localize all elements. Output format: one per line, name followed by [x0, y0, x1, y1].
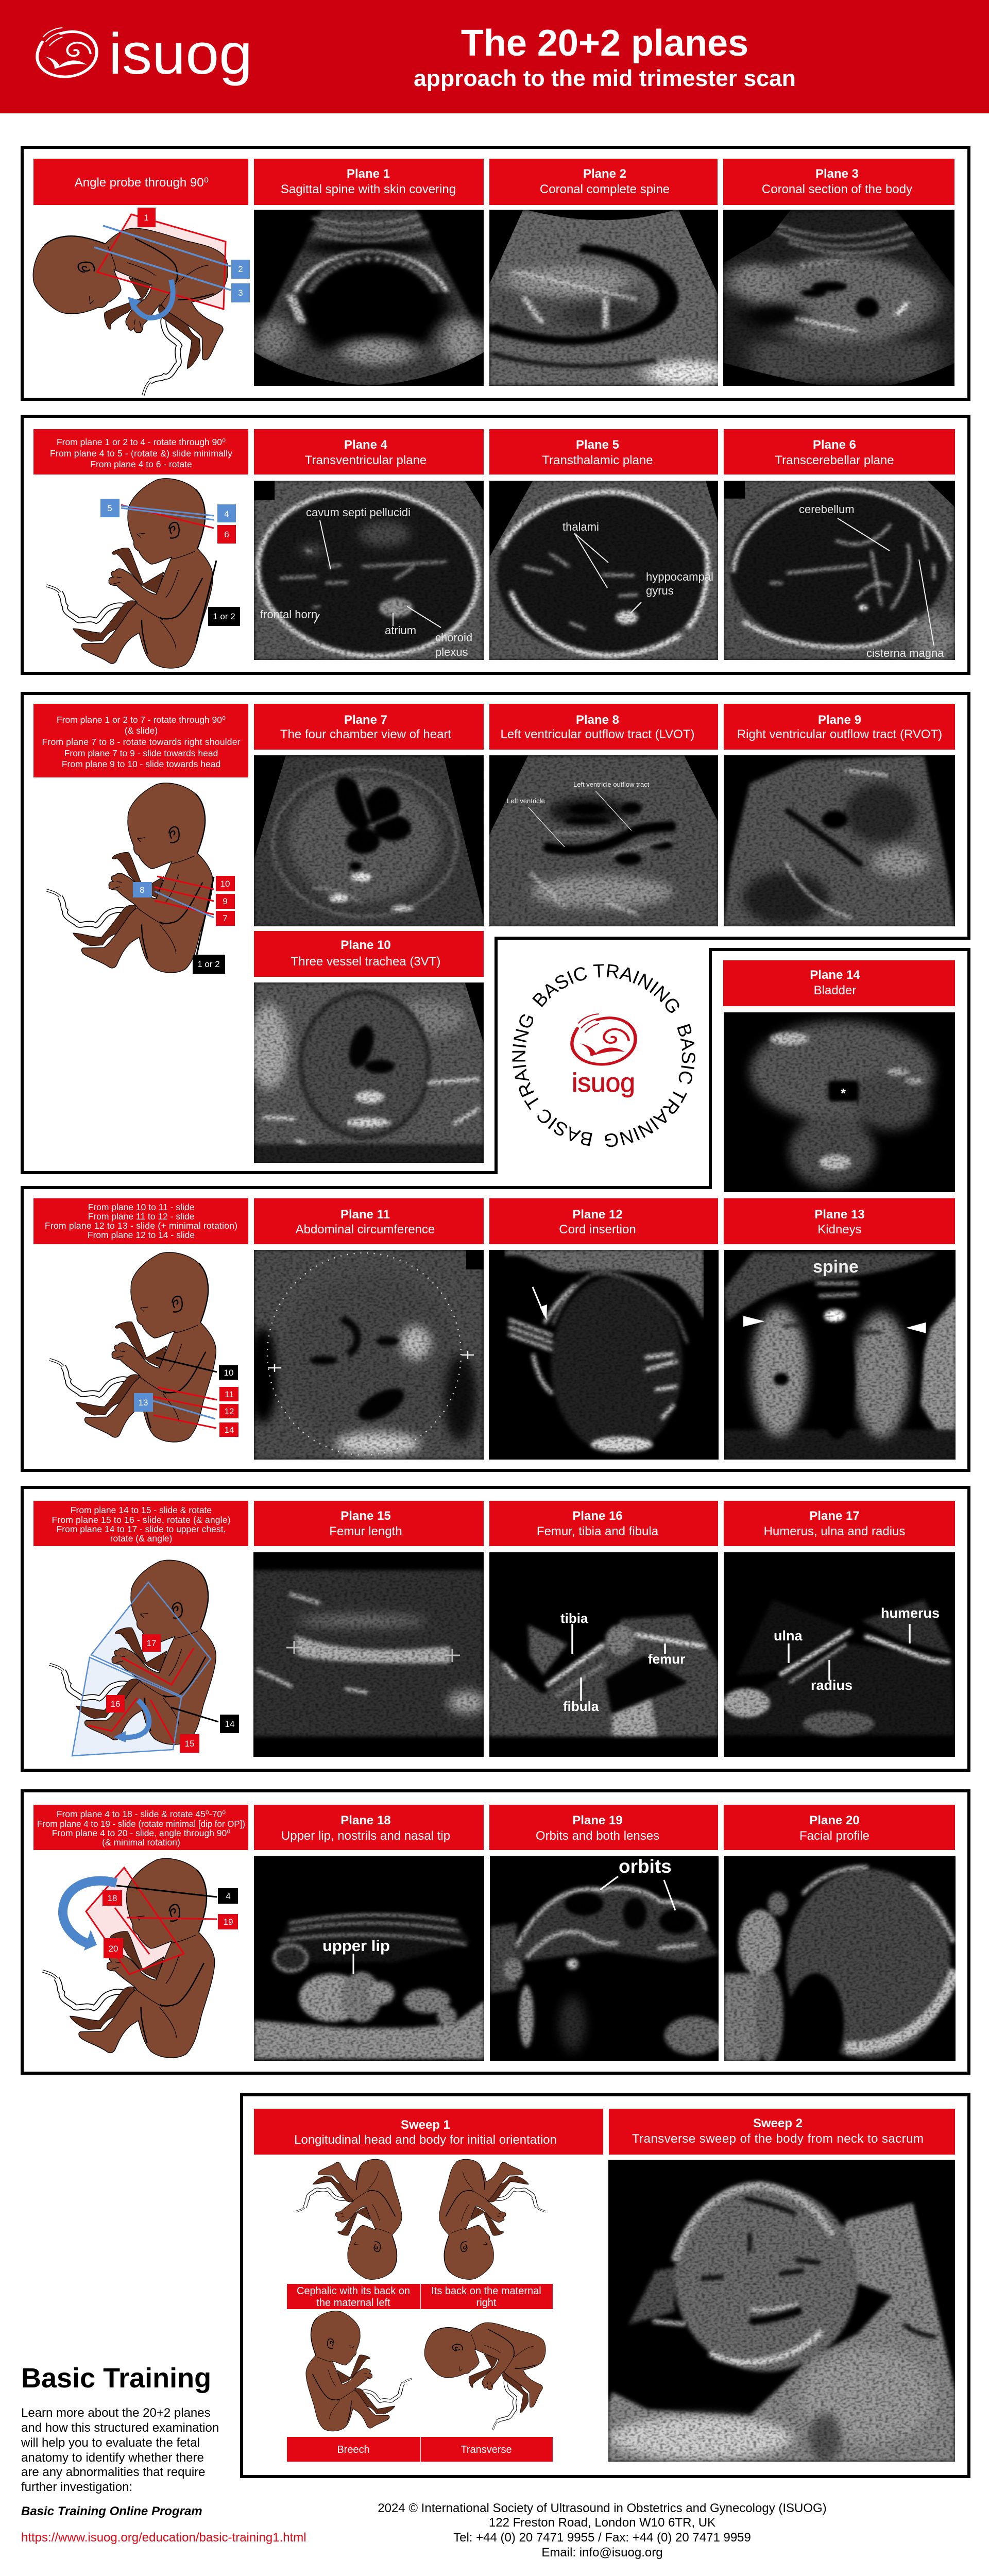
heading: plane 12: Cord insertion	[559, 1223, 636, 1236]
heading: plane 17: Humerus, ulna and radius	[764, 1524, 905, 1538]
footer: contact: 122 Freston Road, London W10 6TR, UK	[489, 2516, 715, 2530]
footer: contact	[378, 2501, 827, 2560]
ultrasound: plane 16: tibia	[560, 1611, 588, 1626]
instruction: planes 1 or 2 to 6	[33, 429, 248, 474]
ultrasound: plane 8: Left ventricle outflow tract	[573, 781, 650, 788]
diagram: fetus with planes 15, 16, 17: 16	[111, 1699, 120, 1709]
ultrasound: plane 11	[250, 1250, 484, 1460]
instruction: planes 14 to 17: rotate (& angle)	[110, 1533, 172, 1544]
diagram: fetus with planes 4, 5, 6: 1 or 2	[213, 612, 235, 621]
diagram: fetus with planes 4, 5, 6: 4	[224, 509, 229, 519]
ultrasound: plane 12	[489, 1250, 719, 1460]
instruction: planes 14 to 17: From plane 14 to 17 - slide to upper chest,	[57, 1524, 226, 1534]
label: cephalic left	[287, 2284, 420, 2309]
instruction: planes 14 to 17	[33, 1501, 248, 1546]
diagram: fetus with planes 4, 5, 6	[46, 479, 240, 668]
heading: plane 19	[489, 1805, 718, 1850]
header band	[0, 0, 989, 113]
instruction: planes 4 to 20: From plane 4 to 20 - slide, angle through 90⁰	[52, 1828, 230, 1838]
ultrasound: plane 5	[489, 481, 719, 661]
panel: basic training logo and planes 11-14	[21, 948, 970, 1472]
heading: plane 20: Plane 20	[809, 1814, 860, 1827]
heading: plane 18: Plane 18	[340, 1814, 391, 1827]
heading: plane 16: Plane 16	[572, 1509, 623, 1523]
icon: isuog logo mark	[37, 28, 97, 77]
instruction: planes 4 to 20: From plane 4 to 19 - slide (rotate minimal [dip for OP])	[37, 1819, 245, 1829]
heading: plane 20	[724, 1805, 955, 1850]
paragraph: further investigation:	[21, 2480, 132, 2494]
paragraph: anatomy to identify whether there	[21, 2451, 204, 2465]
paragraph: Learn more about the 20+2 planes	[21, 2406, 211, 2420]
panel: planes 18-20	[22, 1791, 969, 2075]
diagram: fetus with planes 18, 19, 20: 18	[108, 1893, 117, 1903]
diagram: fetus with planes 18, 19, 20	[42, 1858, 238, 2058]
label: breech	[287, 2437, 420, 2462]
heading: plane 14	[723, 960, 955, 1006]
heading: plane 20: Facial profile	[799, 1829, 869, 1843]
heading: Basic Training	[21, 2363, 211, 2394]
ultrasound: plane 3	[723, 209, 956, 386]
diagram: fetus with planes 1, 2, 3	[33, 208, 250, 395]
footer: contact: Tel: +44 (0) 20 7471 9955 / Fax: +44 (0) 20 7471 9959	[453, 2531, 751, 2545]
heading: plane 3: Coronal section of the body	[762, 182, 912, 196]
heading: plane 10	[254, 931, 484, 977]
diagram: fetus with planes 18, 19, 20: 4	[226, 1891, 231, 1901]
diagram: fetus with planes 4, 5, 6: 5	[107, 503, 112, 513]
ring text: BASIC TRAINING	[532, 964, 679, 1013]
panel: planes 15-17	[22, 1487, 969, 1770]
heading: plane 7: Plane 7	[344, 713, 387, 727]
paragraph: and how this structured examination	[21, 2421, 219, 2435]
illustration: breech	[306, 2311, 412, 2431]
label: cephalic left: Cephalic with its back on	[297, 2285, 410, 2297]
heading: plane 12	[489, 1198, 718, 1244]
footer: contact: Email: info@isuog.org	[541, 2546, 663, 2560]
diagram: fetus with planes 7-10: 10	[220, 879, 230, 889]
heading: plane 16: Femur, tibia and fibula	[537, 1524, 659, 1538]
heading: plane 17	[724, 1501, 955, 1546]
heading: plane 9: Right ventricular outflow tract (RVOT)	[737, 727, 942, 741]
diagram: fetus with planes 1, 2, 3: 1	[144, 213, 149, 223]
ultrasound: plane 6: cisterna magna	[866, 647, 944, 659]
ultrasound: plane 18: upper lip	[322, 1937, 390, 1955]
heading: plane 6: Plane 6	[813, 438, 856, 452]
paragraph: will help you to evaluate the fetal	[21, 2436, 200, 2450]
ultrasound: plane 16	[489, 1552, 719, 1757]
heading: plane 13: Kidneys	[817, 1223, 862, 1236]
subtitle: approach to the mid trimester scan	[414, 66, 796, 91]
ring text: BASIC TRAINING	[512, 1014, 592, 1146]
ultrasound: plane 5: thalami	[562, 520, 599, 533]
heading: plane 1: Sagittal spine with skin covering	[281, 182, 456, 196]
diagram: fetus with planes 7-10: 8	[140, 885, 145, 895]
diagram: fetus with planes 1, 2, 3: 3	[238, 288, 243, 298]
ring text: BASIC TRAINING	[605, 1024, 695, 1147]
left column: basic training	[21, 2363, 306, 2545]
ultrasound: plane 17: ulna	[774, 1628, 803, 1643]
illustration: cephalic, back on maternal right	[439, 2159, 545, 2279]
heading: plane 8: Plane 8	[576, 713, 619, 727]
heading: plane 10: Three vessel trachea (3VT)	[291, 955, 440, 969]
label: transverse	[421, 2437, 553, 2462]
panel: planes 1-3	[22, 147, 969, 399]
ultrasound: plane 5: gyrus	[646, 584, 674, 597]
heading: plane 14: Plane 14	[810, 968, 860, 982]
instruction: planes 14 to 17: From plane 14 to 15 - slide & rotate	[71, 1505, 212, 1515]
ultrasound: plane 4: cavum septi pellucidi	[306, 506, 411, 519]
instruction: planes 10 to 14: From plane 12 to 13 - slide (+ minimal rotation)	[45, 1221, 237, 1231]
diagram: fetus with planes 10-14: 13	[139, 1398, 148, 1408]
heading: plane 11: Abdominal circumference	[296, 1223, 435, 1236]
heading: plane 1: Plane 1	[347, 167, 390, 181]
diagram: fetus with planes 10-14: 10	[224, 1368, 233, 1378]
instruction: planes 10 to 14: From plane 12 to 14 - slide	[88, 1230, 195, 1240]
red wordmark: isuog	[572, 1068, 635, 1098]
heading: plane 2	[489, 159, 718, 205]
title: The 20+2 planes	[461, 23, 748, 64]
heading: plane 8	[489, 704, 718, 750]
heading: plane 3	[723, 159, 954, 205]
ultrasound: plane 2	[486, 209, 731, 386]
diagram: fetus with planes 7-10	[46, 783, 235, 974]
heading: plane 4: Plane 4	[344, 438, 388, 452]
paragraph: are any abnormalities that require	[21, 2465, 206, 2479]
heading: sweep 2: Sweep 2	[753, 2116, 803, 2130]
instruction: planes 4 to 20	[33, 1805, 248, 1850]
heading: plane 8: Left ventricular outflow tract (LVOT)	[500, 727, 695, 741]
ultrasound: plane 9	[724, 755, 955, 926]
heading: plane 1	[254, 159, 484, 205]
heading: sweep 1: Longitudinal head and body for initial orientation	[294, 2133, 557, 2147]
panel: planes 7-10	[22, 693, 969, 1173]
ultrasound: plane 5: hyppocampal	[646, 570, 713, 583]
diagram: fetus with planes 10-14	[49, 1252, 238, 1442]
instruction: planes 1 or 2 to 6: From plane 1 or 2 to 4 - rotate through 90⁰	[57, 437, 226, 447]
program name: Basic Training Online Program	[21, 2504, 202, 2518]
diagram: fetus with planes 18, 19, 20: 19	[224, 1917, 233, 1927]
heading: plane 6	[724, 429, 955, 474]
ultrasound: plane 6: cerebellum	[799, 503, 855, 516]
instruction: planes 1 or 2 to 10: (& slide)	[125, 725, 158, 736]
ultrasound: plane 4: atrium	[385, 624, 416, 637]
label: transverse: Transverse	[461, 2444, 512, 2455]
instruction: planes 10 to 14	[33, 1198, 248, 1244]
illustration: cephalic, back on maternal left	[296, 2159, 402, 2279]
instruction: planes 10 to 14: From plane 10 to 11 - slide	[88, 1202, 194, 1212]
heading: plane 9	[724, 704, 955, 750]
heading: plane 18: Upper lip, nostrils and nasal tip	[281, 1829, 450, 1843]
ultrasound: plane 16: femur	[648, 1651, 685, 1667]
heading: plane 12: Plane 12	[572, 1208, 623, 1222]
ultrasound: plane 20	[724, 1856, 956, 2075]
ultrasound: plane 4: choroid	[435, 631, 472, 644]
diagram: fetus with planes 15, 16, 17: 17	[147, 1638, 156, 1648]
diagram: fetus with planes 15, 16, 17: 14	[225, 1719, 234, 1729]
instruction: planes 1 or 2 to 10: From plane 1 or 2 to 7 - rotate through 90⁰	[57, 715, 226, 725]
label: cephalic right	[421, 2284, 553, 2309]
panel: planes 4-6	[22, 416, 969, 673]
ultrasound: plane 8: Left ventricle	[507, 797, 545, 805]
instruction: planes 1 or 2 to 10: From plane 9 to 10 - slide towards head	[62, 759, 220, 769]
instruction: planes 4 to 20: (& minimal rotation)	[102, 1837, 180, 1848]
diagram: fetus with planes 15, 16, 17: 15	[185, 1739, 194, 1749]
ultrasound: plane 4: frontal horn	[260, 608, 317, 621]
heading: plane 5: Plane 5	[576, 438, 619, 452]
label: breech: Breech	[337, 2444, 370, 2455]
ultrasound: sweep 2	[608, 2160, 955, 2463]
diagram: fetus with planes 10-14: 12	[225, 1406, 234, 1416]
heading: plane 2: Coronal complete spine	[540, 182, 670, 196]
instruction: planes 1 or 2 to 6: From plane 4 to 5 - (rotate &) slide minimally	[50, 448, 232, 459]
illustration: transverse	[424, 2323, 545, 2430]
heading: plane 9: Plane 9	[818, 713, 861, 727]
ultrasound: plane 1	[254, 210, 486, 386]
ultrasound: plane 17: radius	[811, 1677, 852, 1693]
heading: plane 13: Plane 13	[814, 1208, 865, 1222]
heading: plane 16	[489, 1501, 718, 1546]
instruction: planes 1 or 2 to 10: From plane 7 to 9 - slide towards head	[64, 748, 218, 758]
ultrasound: plane 4	[250, 480, 486, 666]
ultrasound: plane 14: *	[841, 1086, 846, 1101]
ultrasound: plane 4: plexus	[435, 646, 468, 658]
heading: plane 10: Plane 10	[340, 938, 391, 952]
heading: plane 19: Plane 19	[572, 1814, 623, 1827]
ultrasound: plane 16: fibula	[563, 1699, 599, 1714]
heading: plane 5	[489, 429, 718, 474]
diagram: fetus with planes 1, 2, 3: 2	[238, 264, 243, 274]
diagram: fetus with planes 7-10: 7	[223, 913, 228, 923]
badge: basic training ring and logo	[512, 964, 695, 1147]
heading: plane 6: Transcerebellar plane	[775, 453, 894, 467]
heading: plane 5: Transthalamic plane	[542, 453, 653, 467]
diagram: fetus with planes 15, 16, 17	[49, 1560, 239, 1756]
ultrasound: plane 8	[489, 755, 719, 926]
url: https://www.isuog.org/education/basic-training1.html	[21, 2531, 306, 2545]
ultrasound: plane 13: spine	[813, 1257, 859, 1277]
paragraph	[21, 2406, 219, 2494]
ultrasound: plane 14	[724, 1012, 955, 1192]
heading: plane 11	[254, 1198, 484, 1244]
instruction: planes 1 or 2 to 6: From plane 4 to 6 - rotate	[90, 459, 192, 469]
ultrasound: plane 10	[250, 982, 484, 1164]
heading: plane 3: Plane 3	[815, 167, 859, 181]
ultrasound: plane 13	[724, 1250, 957, 1461]
heading: plane 2: Plane 2	[583, 167, 626, 181]
label: cephalic right: Its back on the maternal	[431, 2285, 541, 2297]
icon: isuog red logo	[572, 1014, 636, 1064]
ultrasound: plane 6	[724, 480, 957, 660]
instruction: planes 10 to 14: From plane 11 to 12 - slide	[88, 1211, 194, 1222]
diagram: fetus with planes 4, 5, 6: 6	[224, 530, 229, 539]
ultrasound: plane 19: orbits	[619, 1856, 672, 1877]
heading: plane 4: Transventricular plane	[305, 453, 427, 467]
ultrasound: plane 19	[490, 1856, 724, 2061]
heading: sweep 2: Transverse sweep of the body from neck to sacrum	[632, 2132, 924, 2146]
diagram: fetus with planes 7-10: 9	[223, 896, 228, 906]
instruction: planes 4 to 20: From plane 4 to 18 - slide & rotate 45⁰-70⁰	[57, 1809, 226, 1819]
heading: sweep 2	[609, 2109, 955, 2155]
instruction: planes 1 or 2 to 10	[33, 704, 248, 777]
heading: plane 4	[254, 429, 484, 474]
footer: contact: 2024 © International Society of Ultrasound in Obstetrics and Gynecology (ISUOG)	[378, 2501, 827, 2515]
diagram: fetus with planes 10-14: 14	[225, 1425, 234, 1435]
ultrasound: plane 15	[253, 1552, 486, 1757]
panel: sweeps	[242, 2095, 969, 2477]
diagram: fetus with planes 18, 19, 20: 20	[109, 1944, 118, 1954]
heading: plane 18	[254, 1805, 484, 1850]
heading: plane 11: Plane 11	[340, 1208, 390, 1222]
ultrasound: plane 18	[254, 1856, 484, 2061]
heading: plane 7	[254, 704, 484, 750]
heading: plane 15	[254, 1501, 484, 1546]
heading: plane 19: Orbits and both lenses	[536, 1829, 659, 1843]
ultrasound: plane 17	[723, 1552, 955, 1757]
diagram: fetus with planes 7-10: 1 or 2	[197, 959, 220, 969]
instruction: angle probe	[33, 159, 248, 205]
heading: plane 17: Plane 17	[809, 1509, 860, 1523]
instruction: planes 14 to 17: From plane 15 to 16 - slide, rotate (& angle)	[52, 1515, 231, 1525]
heading: plane 15: Plane 15	[340, 1509, 391, 1523]
instruction: angle probe: Angle probe through 90⁰	[75, 176, 209, 190]
label: cephalic right: right	[476, 2297, 497, 2309]
diagram: fetus with planes 10-14: 11	[225, 1389, 234, 1399]
instruction: planes 1 or 2 to 10: From plane 7 to 8 - rotate towards right shoulder	[42, 737, 241, 747]
heading: sweep 1: Sweep 1	[401, 2118, 450, 2132]
heading: plane 7: The four chamber view of heart	[280, 727, 451, 741]
heading: plane 14: Bladder	[814, 984, 856, 997]
heading: plane 15: Femur length	[329, 1524, 402, 1538]
logo wordmark: isuog	[109, 22, 252, 86]
heading: plane 13	[724, 1198, 955, 1244]
ultrasound: plane 7	[254, 755, 484, 926]
heading: sweep 1	[254, 2109, 603, 2155]
ultrasound: plane 17: humerus	[881, 1605, 940, 1621]
label: cephalic left: the maternal left	[316, 2297, 390, 2309]
